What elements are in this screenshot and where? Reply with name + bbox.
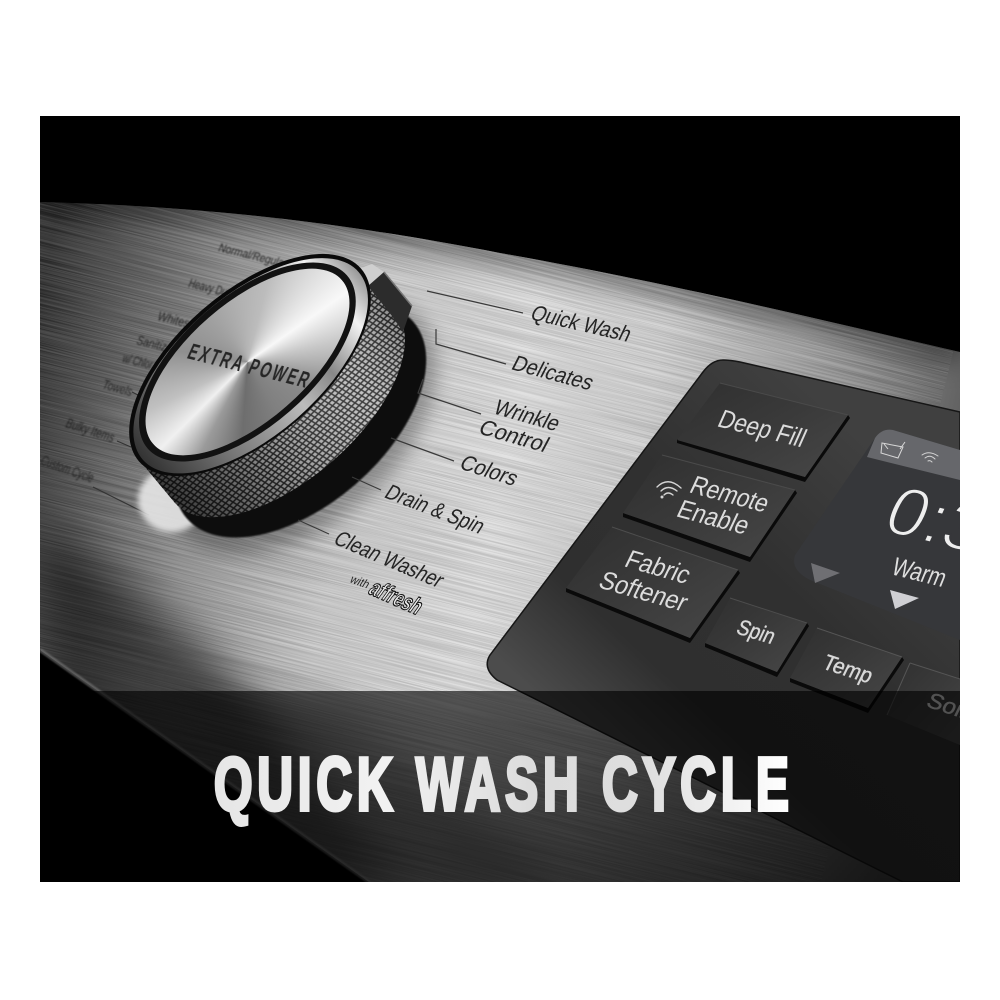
knob lettering: EXTRA POWER (184, 340, 313, 393)
label: Delicates: Delicates (508, 351, 598, 395)
cycle labels: right side (329, 301, 636, 620)
label: Wrinkle Control: Control (475, 415, 554, 457)
button: Remote Enable: Remote (685, 470, 775, 518)
label: Wrinkle Control (480, 399, 558, 452)
label: Drain and Spin: Drain & Spin (380, 480, 490, 538)
cycle labels: blurred left side: w/ Chlor (121, 350, 154, 372)
knob highlight crescent (138, 468, 206, 532)
leader lines left (93, 392, 149, 515)
button: Remote Enable (623, 455, 797, 562)
title: QUICK WASH CYCLE (214, 743, 789, 827)
infographic canvas (40, 116, 960, 882)
icon: drawer (881, 442, 905, 458)
label: Clean Washer with affresh (335, 532, 444, 616)
control knob (129, 254, 412, 518)
button: Deep Fill (677, 383, 850, 482)
steel console surface (40, 202, 960, 882)
button: Spin: Spin (733, 615, 780, 649)
knob shadow (178, 316, 428, 538)
button: Spin (705, 598, 809, 677)
button: Fabric Softener: Softener (594, 565, 693, 617)
dark control panel (487, 360, 1000, 882)
icon: status wifi (922, 453, 938, 462)
button: Temp (790, 628, 904, 713)
knob rim (129, 254, 371, 476)
knob knurled body (140, 269, 405, 517)
display temperature: Warm (888, 552, 951, 593)
cycle labels: blurred left side (39, 240, 289, 486)
button: Fabric Softener: Fabric (620, 544, 696, 589)
label: Colors: Colors (455, 450, 523, 490)
knob soft halo (175, 299, 446, 561)
lower edge highlight of console (40, 650, 369, 882)
cycle labels: blurred left side: Towels (101, 376, 135, 399)
icon: left arrow (811, 563, 840, 583)
button: Soil: Soil (923, 688, 972, 723)
button: Deep Fill: Deep Fill (714, 404, 811, 453)
icon: wifi (657, 482, 681, 498)
cycle labels: blurred left side: Sanitize (135, 332, 174, 356)
cycle labels: blurred left side: Bulky Items (64, 415, 117, 445)
icon: selected arrow (890, 590, 919, 609)
cycle labels: blurred left side: Whites (156, 308, 191, 331)
title band overlay (40, 691, 960, 882)
knob pointer (356, 264, 412, 332)
label: Quick Wash: Quick Wash (527, 301, 636, 346)
leader lines right (298, 291, 523, 534)
cycle labels: blurred left side: Normal/Regular (217, 240, 289, 271)
button: Soil (887, 662, 960, 745)
button: Temp: Temp (819, 650, 877, 688)
button: Remote Enable: Enable (672, 494, 755, 540)
label: Wrinkle Control: Wrinkle (490, 395, 565, 436)
display time: 0:3 (874, 471, 1000, 567)
button: Fabric Softener (566, 527, 740, 643)
label: Clean Washer with affresh: Clean Washer (329, 526, 450, 592)
photo: washer control panel (40, 116, 960, 882)
display screen (811, 430, 960, 640)
cycle labels: blurred left side: Heavy Duty (187, 275, 237, 301)
label: Clean Washer with affresh: affresh (363, 576, 429, 620)
knob brushed metal face (146, 268, 350, 456)
label: Clean Washer with affresh: with (347, 572, 373, 591)
cycle labels: blurred left side: Custom Cycle (39, 452, 96, 486)
display status bar (867, 430, 960, 480)
